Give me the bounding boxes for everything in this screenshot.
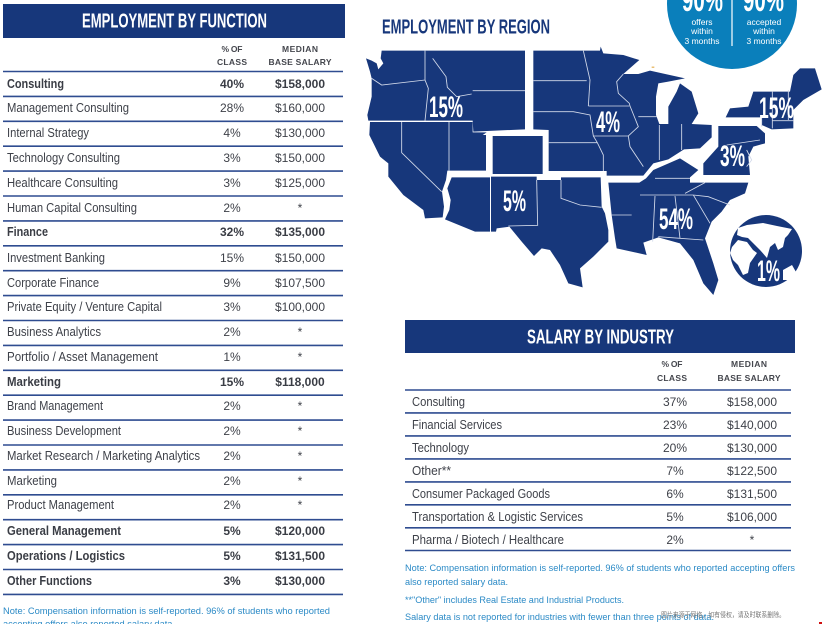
table rows: industry: 20% — [663, 441, 687, 455]
table rows: function: 15% — [220, 251, 244, 265]
table rows: function: 2% — [223, 399, 241, 413]
region: southwest — [445, 177, 608, 287]
table rows: industry: 6% — [666, 487, 684, 501]
table rows: function: $158,000 — [275, 77, 325, 91]
table rows: function: Healthcare Consulting — [7, 176, 118, 190]
heading: employment by function: EMPLOYMENT BY FUNCTION — [82, 10, 267, 32]
table rows: industry: Pharma / Biotech / Healthcare — [412, 533, 564, 547]
region: northwest — [366, 51, 525, 132]
table rows: function: Investment Banking — [7, 251, 105, 265]
table rows: function: $131,500 — [275, 549, 325, 563]
map shapes — [366, 47, 822, 295]
table rows: function: Market Research / Marketing Analytics — [7, 449, 200, 463]
table rows: function: 4% — [223, 126, 241, 140]
badge: offers and acceptances within 3 months — [667, 0, 797, 69]
table rows: function: $150,000 — [275, 251, 325, 265]
table rows: industry: * — [750, 533, 755, 547]
table rows: function: 15% — [220, 375, 244, 389]
table rows: function: $120,000 — [275, 524, 325, 538]
column headers: MEDIAN — [731, 359, 767, 369]
table rows: industry: 7% — [666, 464, 684, 478]
table rows: function: $130,000 — [275, 574, 325, 588]
table rows: function: Business Development — [7, 424, 121, 438]
table rows: function: 2% — [223, 474, 241, 488]
panel: salary by industry — [405, 320, 795, 623]
table rows: function: Marketing — [7, 375, 61, 389]
table rows: function: * — [298, 498, 303, 512]
table rows: function: Product Management — [7, 498, 114, 512]
badge: offers and acceptances within 3 months: 3 months — [747, 36, 781, 46]
table rows: industry: Transportation & Logistic Services — [412, 510, 583, 524]
badge: offers and acceptances within 3 months: accepted — [747, 17, 782, 27]
table rows: industry: 2% — [666, 533, 684, 547]
table rows: industry: Financial Services — [412, 418, 502, 432]
heading: employment by function — [3, 4, 345, 38]
table rows: function: 9% — [223, 276, 241, 290]
label: south share: 54% — [659, 203, 693, 236]
table rows: function: Brand Management — [7, 399, 103, 413]
icon: globe, international share — [730, 215, 802, 288]
table rows: function: 40% — [220, 77, 244, 91]
table rows: industry: 23% — [663, 418, 687, 432]
badge: offers and acceptances within 3 months: within — [690, 26, 713, 36]
label: southwest share: 5% — [503, 185, 526, 218]
table rows: industry — [405, 390, 791, 550]
region: mid-atlantic — [703, 126, 765, 175]
table rows: industry: $131,500 — [727, 487, 777, 501]
table rows: function: * — [298, 325, 303, 339]
table rows: industry: 37% — [663, 395, 687, 409]
table rows: function: Business Analytics — [7, 325, 101, 339]
small speck — [652, 66, 654, 69]
table rows: function — [3, 72, 343, 594]
table rows: function: Private Equity / Venture Capital — [7, 300, 162, 314]
table rows: function: $107,500 — [275, 276, 325, 290]
table rows: function: Operations / Logistics — [7, 549, 125, 563]
table rows: function: $135,000 — [275, 225, 325, 239]
table rows: function: Human Capital Consulting — [7, 201, 137, 215]
table rows: function: 28% — [220, 101, 244, 115]
notes: industry table: Salary data is not reported for industries with fewer than three points of data. — [405, 612, 714, 623]
table rows: function: Corporate Finance — [7, 276, 99, 290]
watermark: 图片来源于网络，如有侵权，请及时联系删除。 — [661, 610, 785, 619]
table rows: function: $100,000 — [275, 300, 325, 314]
table rows: industry: $122,500 — [727, 464, 777, 478]
notes: industry table — [405, 563, 795, 623]
table rows: industry: $106,000 — [727, 510, 777, 524]
table rows: function: $125,000 — [275, 176, 325, 190]
table rows: industry: $140,000 — [727, 418, 777, 432]
panel: employment by function — [3, 4, 345, 624]
icon: globe, international share: 1% — [757, 255, 780, 288]
table rows: function: 32% — [220, 225, 244, 239]
badge: offers and acceptances within 3 months: within — [752, 26, 775, 36]
table rows: function: Internal Strategy — [7, 126, 90, 140]
column headers — [657, 359, 781, 383]
label: northwest share: 15% — [429, 91, 463, 124]
map: United States by region — [366, 47, 822, 295]
column headers — [217, 44, 332, 67]
column headers: % OF — [222, 44, 242, 54]
table rows: industry: Consulting — [412, 395, 465, 409]
region: colorado — [493, 136, 543, 174]
table rows: function: * — [298, 201, 303, 215]
table rows: industry: $130,000 — [727, 441, 777, 455]
table rows: function: Other Functions — [7, 574, 92, 588]
label: mid-atlantic share: 3% — [720, 140, 745, 173]
column headers: MEDIAN — [282, 44, 318, 54]
table rows: function: 2% — [223, 325, 241, 339]
table rows: function: $118,000 — [275, 375, 325, 389]
badge: offers and acceptances within 3 months: 3 months — [685, 36, 719, 46]
table rows: function: 2% — [223, 449, 241, 463]
table rows: industry: Consumer Packaged Goods — [412, 487, 550, 501]
table rows: function: * — [298, 424, 303, 438]
notes: industry table: Note: Compensation information is self-reported. 96% of students who reported accepting offers — [405, 563, 795, 574]
column headers: % OF — [662, 359, 682, 369]
region: far west — [369, 122, 487, 218]
column headers: BASE SALARY — [718, 373, 781, 383]
heading: employment by region: EMPLOYMENT BY REGION — [382, 16, 550, 38]
state borders — [372, 51, 793, 242]
table rows: function: 3% — [223, 300, 241, 314]
table rows: function: $160,000 — [275, 101, 325, 115]
table rows: function: Portfolio / Asset Management — [7, 350, 158, 364]
label: northeast share: 15% — [759, 92, 794, 125]
table rows: industry: Technology — [412, 441, 470, 455]
table rows: industry: Other** — [412, 464, 451, 478]
table rows: function: Technology Consulting — [7, 151, 120, 165]
region: midwest — [533, 47, 712, 176]
badge: offers and acceptances within 3 months: offers — [691, 17, 713, 27]
heading: salary by industry — [405, 320, 795, 353]
table rows: function: * — [298, 474, 303, 488]
table rows: function: 3% — [223, 176, 241, 190]
note: function table — [3, 606, 330, 624]
table rows: function: 3% — [223, 574, 241, 588]
table rows: function: Consulting — [7, 77, 64, 91]
table rows: industry: 5% — [666, 510, 684, 524]
table rows: function: 5% — [223, 549, 241, 563]
notes: industry table: **"Other" includes Real Estate and Industrial Products. — [405, 595, 624, 606]
table rows: function: 3% — [223, 151, 241, 165]
column headers: BASE SALARY — [268, 57, 332, 67]
heading: salary by industry: SALARY BY INDUSTRY — [527, 326, 674, 348]
column headers: CLASS — [657, 373, 687, 383]
table rows: function: 5% — [223, 524, 241, 538]
table rows: function: $150,000 — [275, 151, 325, 165]
table rows: function: 1% — [223, 350, 241, 364]
table rows: function: Marketing — [7, 474, 57, 488]
table rows: function: 2% — [223, 498, 241, 512]
table rows: function: * — [298, 350, 303, 364]
table rows: industry: $158,000 — [727, 395, 777, 409]
table rows: function: * — [298, 399, 303, 413]
table rows: function: 2% — [223, 424, 241, 438]
column headers: CLASS — [217, 57, 247, 67]
note: function table: Note: Compensation information is self-reported. 96% of students who reported — [3, 606, 330, 617]
table rows: function: Finance — [7, 225, 48, 239]
label: midwest share: 4% — [596, 106, 620, 139]
table rows: function: 2% — [223, 201, 241, 215]
region: northeast — [726, 68, 822, 129]
notes: industry table: also reported salary data. — [405, 577, 508, 588]
table rows: function: General Management — [7, 524, 122, 538]
table rows: function: Management Consulting — [7, 101, 129, 115]
region: south — [608, 158, 748, 295]
table rows: function: * — [298, 449, 303, 463]
table rows: function: $130,000 — [275, 126, 325, 140]
